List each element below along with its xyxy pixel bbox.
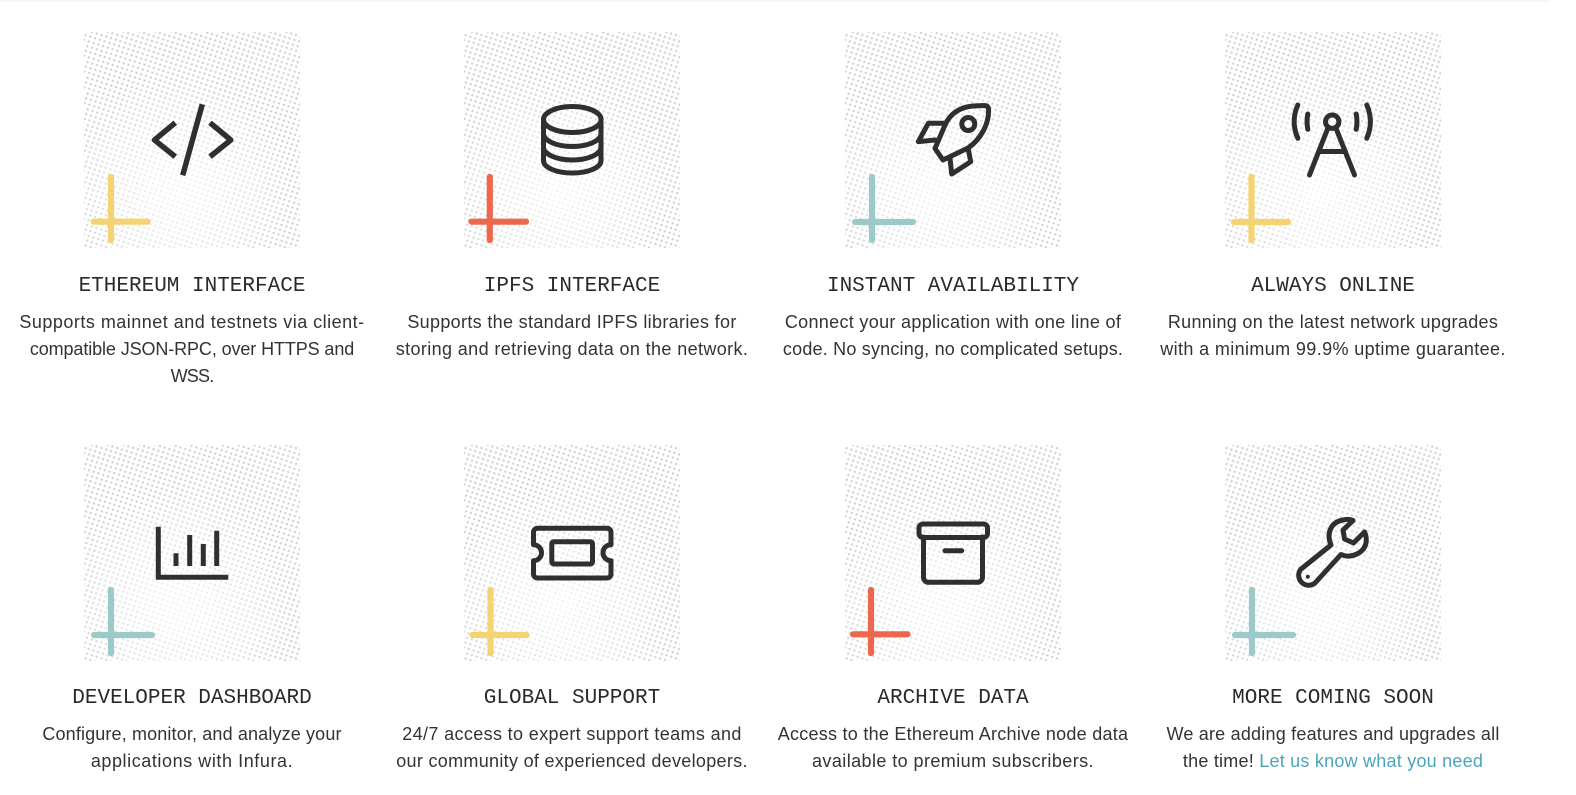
description: compatible JSON-RPC, over HTTPS and — [30, 339, 354, 359]
description: 24/7 access to expert support teams and — [402, 724, 742, 744]
description: with a minimum 99.9% uptime guarantee. — [1160, 339, 1506, 359]
description — [783, 312, 1123, 359]
icon tile: ticket with yellow cross — [464, 445, 680, 661]
description: Running on the latest network upgrades — [1168, 312, 1498, 332]
heading: ALWAYS ONLINE — [1251, 275, 1415, 298]
icon tile: wrench with teal cross — [1225, 445, 1441, 661]
card: Global support — [396, 445, 748, 771]
description: We are adding features and upgrades all — [1166, 724, 1500, 744]
description: Configure, monitor, and analyze your — [42, 724, 342, 744]
description: WSS. — [171, 366, 213, 386]
card: Developer dashboard — [42, 445, 342, 771]
heading: GLOBAL SUPPORT — [484, 687, 660, 710]
description: Supports mainnet and testnets via client- — [19, 312, 365, 332]
card: Archive data — [778, 445, 1128, 771]
description: available to premium subscribers. — [812, 751, 1094, 771]
description — [1160, 312, 1506, 359]
description — [778, 724, 1128, 771]
description: storing and retrieving data on the network. — [396, 339, 748, 359]
icon tile: code brackets with yellow cross — [84, 32, 300, 248]
description — [396, 724, 748, 771]
description: Supports the standard IPFS libraries for — [407, 312, 737, 332]
card: IPFS interface — [396, 32, 748, 359]
description: Connect your application with one line of — [785, 312, 1121, 332]
icon tile: archive box with red cross — [845, 445, 1061, 661]
description: the time! Let us know what you need — [1183, 751, 1483, 771]
icon tile: bar chart with teal cross — [84, 445, 300, 661]
description — [1166, 724, 1500, 771]
description — [19, 312, 365, 386]
description — [396, 312, 748, 359]
heading: ETHEREUM INTERFACE — [79, 275, 305, 298]
icon tile: antenna with yellow cross — [1225, 32, 1441, 248]
heading: DEVELOPER DASHBOARD — [72, 687, 312, 710]
description: Access to the Ethereum Archive node data — [778, 724, 1128, 744]
card: Ethereum interface — [19, 32, 365, 386]
icon tile: database with red cross — [464, 32, 680, 248]
heading: INSTANT AVAILABILITY — [827, 275, 1079, 298]
icon tile: rocket with teal cross — [845, 32, 1061, 248]
description: applications with Infura. — [91, 751, 293, 771]
heading: ARCHIVE DATA — [877, 687, 1029, 710]
card: Instant availability — [783, 32, 1123, 359]
description: code. No syncing, no complicated setups. — [783, 339, 1123, 359]
card: More coming soon — [1166, 445, 1500, 771]
description: our community of experienced developers. — [396, 751, 748, 771]
description — [42, 724, 342, 771]
heading: IPFS INTERFACE — [484, 275, 660, 298]
heading: MORE COMING SOON — [1232, 687, 1434, 710]
card: Always online — [1160, 32, 1506, 359]
